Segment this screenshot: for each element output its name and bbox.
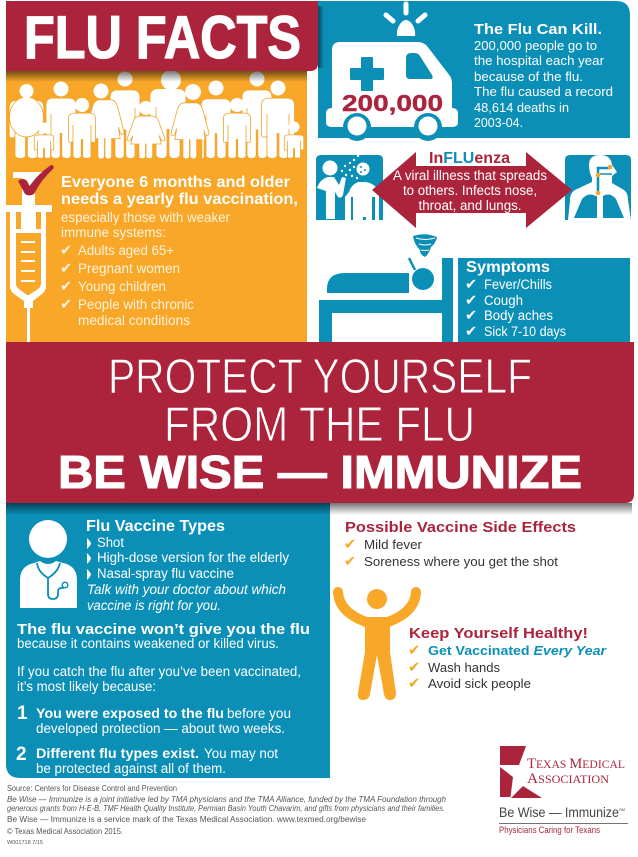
- vaccine types list: Shot: [97, 535, 124, 550]
- logo: Texas Medical Association: [499, 746, 628, 836]
- symptoms list: Cough: [484, 293, 523, 308]
- icon: person sick in bed: [319, 234, 453, 342]
- influenza description: to others. Infects nose,: [403, 183, 537, 198]
- flu can kill text: because of the flu.: [474, 69, 583, 84]
- side effects section: Possible Vaccine Side Effects: [345, 519, 576, 536]
- panel: symptoms: [458, 258, 630, 343]
- association name: ASSOCIATION: [527, 771, 610, 787]
- at-risk groups list: Adults aged 65+: [78, 243, 174, 258]
- vaccine types list: High-dose version for the elderly: [97, 550, 289, 565]
- icon: syringe with check mark: [5, 165, 54, 342]
- vaccine reassurance text: it’s most likely because:: [17, 679, 156, 694]
- side effects section: Mild fever: [364, 537, 423, 552]
- vaccine types list: Flu Vaccine Types: [86, 518, 225, 535]
- panel: vaccine types: [6, 503, 330, 778]
- flu can kill text: [474, 21, 613, 130]
- influenza description: throat, and lungs.: [418, 198, 522, 213]
- keep healthy section: ✔: [408, 643, 420, 659]
- at-risk groups list: ✔: [60, 243, 72, 259]
- icon: family group: [9, 70, 304, 159]
- side effects section: [344, 519, 576, 570]
- banner: protect yourself: PROTECT YOURSELF: [108, 350, 532, 404]
- at-risk groups list: ✔: [60, 279, 72, 295]
- side effects section: ✔: [344, 537, 356, 553]
- symptoms list: Sick 7-10 days: [484, 324, 566, 339]
- shadow under title: [6, 71, 307, 82]
- panel: influenza explanation: [316, 150, 631, 228]
- association name: [527, 756, 625, 787]
- icon: doctor with stethoscope: [20, 520, 77, 608]
- tagline: Physicians Caring for Texans: [499, 825, 600, 836]
- reason 1: You were exposed to the flu: [36, 706, 224, 721]
- at-risk groups list: ✔: [60, 261, 72, 277]
- vaccine types list: Talk with your doctor about which: [87, 582, 286, 597]
- reason 2: 2: [16, 744, 27, 765]
- side effects section: Soreness where you get the shot: [364, 554, 558, 569]
- reason 1: before you: [227, 706, 291, 721]
- at-risk groups list: [60, 210, 230, 328]
- influenza description: [393, 168, 547, 213]
- reason 2: You may not: [204, 746, 278, 761]
- vaccine reassurance text: [17, 621, 310, 694]
- symptoms list: ✔: [465, 293, 477, 309]
- double arrow: [372, 152, 572, 228]
- at-risk groups list: Pregnant women: [78, 261, 180, 276]
- footer credits: Source: Centers for Disease Control and Prevention: [7, 784, 177, 793]
- panel: symptoms: Symptoms: [466, 259, 550, 276]
- reason 2: be protected against all of them.: [36, 761, 226, 776]
- vaccine types list: [86, 518, 289, 613]
- keep healthy section: ✔: [408, 676, 420, 692]
- association name: TEXAS MEDICAL: [527, 756, 625, 772]
- panel: the flu can kill: [318, 1, 630, 141]
- reason 1: 1: [17, 703, 28, 724]
- flu can kill text: 2003-04.: [474, 115, 523, 130]
- reason 1: [17, 703, 291, 736]
- flu can kill text: The Flu Can Kill.: [474, 21, 602, 38]
- footer credits: Be Wise — Immunize is a joint initiative led by TMA physicians and the TMA Alliance, funded by the TMA Foundation through: [7, 795, 447, 804]
- tagline: [499, 804, 628, 836]
- footer credits: [7, 784, 447, 846]
- keep healthy section: [408, 625, 607, 692]
- keep healthy section: Get Vaccinated Every Year: [428, 643, 607, 658]
- vaccine types list: vaccine is right for you.: [87, 598, 221, 613]
- vaccination headline: [61, 174, 298, 208]
- symptoms list: Fever/Chills: [484, 277, 552, 292]
- keep healthy section: Avoid sick people: [428, 676, 531, 691]
- influenza description: A viral illness that spreads: [393, 168, 547, 183]
- footer credits: generous grants from H-E-B, TMF Health Quality Institute, Permian Basin Youth Chavarim, and gifts from physicians and their families.: [7, 804, 445, 813]
- at-risk groups list: immune systems:: [61, 225, 166, 240]
- reason 2: Different flu types exist.: [36, 746, 199, 761]
- banner: protect yourself: FROM THE FLU: [164, 398, 475, 452]
- footer credits: W001718 7/15: [7, 840, 43, 846]
- title banner: FLU FACTS: [24, 4, 301, 71]
- icon: respiratory system: [565, 155, 631, 220]
- icon: star logo mark: [500, 746, 542, 798]
- symptoms list: ✔: [465, 277, 477, 293]
- icon: healthy person with arms raised: [338, 589, 416, 700]
- vaccination headline: Everyone 6 months and older: [61, 174, 290, 191]
- icon: ambulance: [326, 4, 458, 141]
- vaccine reassurance text: because it contains weakened or killed virus.: [17, 636, 279, 651]
- symptoms list: ✔: [465, 324, 477, 340]
- influenza heading: InFLUenza: [429, 150, 510, 167]
- icon: sneezing people: [316, 155, 383, 220]
- flu can kill text: The flu caused a record: [474, 84, 613, 99]
- at-risk groups list: especially those with weaker: [61, 210, 230, 225]
- vaccination headline: needs a yearly flu vaccination,: [61, 191, 298, 208]
- at-risk groups list: medical conditions: [78, 313, 190, 328]
- footer credits: Be Wise — Immunize is a service mark of the Texas Medical Association. www.texmed.org/bewise: [7, 815, 367, 824]
- panel: who needs vaccination: [5, 68, 307, 344]
- footer credits: © Texas Medical Association 2015.: [7, 827, 123, 836]
- vaccine types list: Nasal-spray flu vaccine: [97, 566, 234, 581]
- tagline: Be Wise — Immunize: [499, 804, 619, 820]
- flu can kill text: the hospital each year: [474, 53, 605, 68]
- vaccine reassurance text: If you catch the flu after you’ve been vaccinated,: [17, 664, 301, 679]
- tagline: SM: [619, 807, 625, 812]
- shadow under banner: [6, 503, 632, 515]
- icon: ambulance: 200,000: [342, 90, 443, 116]
- at-risk groups list: Young children: [78, 279, 166, 294]
- banner: protect yourself: [6, 342, 634, 503]
- symptoms list: ✔: [465, 308, 477, 324]
- symptoms list: Body aches: [484, 308, 553, 323]
- reason 2: [16, 744, 278, 776]
- at-risk groups list: People with chronic: [78, 297, 194, 312]
- vaccine reassurance text: The flu vaccine won’t give you the flu: [17, 621, 310, 638]
- flu can kill text: 48,614 deaths in: [474, 100, 569, 115]
- keep healthy section: Keep Yourself Healthy!: [409, 625, 588, 642]
- keep healthy section: Wash hands: [428, 660, 500, 675]
- flu can kill text: 200,000 people go to: [474, 38, 597, 53]
- keep healthy section: ✔: [408, 660, 420, 676]
- reason 1: developed protection — about two weeks.: [36, 721, 285, 736]
- side effects section: ✔: [344, 554, 356, 570]
- at-risk groups list: ✔: [60, 297, 72, 313]
- banner: protect yourself: BE WISE — IMMUNIZE: [58, 446, 582, 498]
- symptoms list: [465, 277, 566, 340]
